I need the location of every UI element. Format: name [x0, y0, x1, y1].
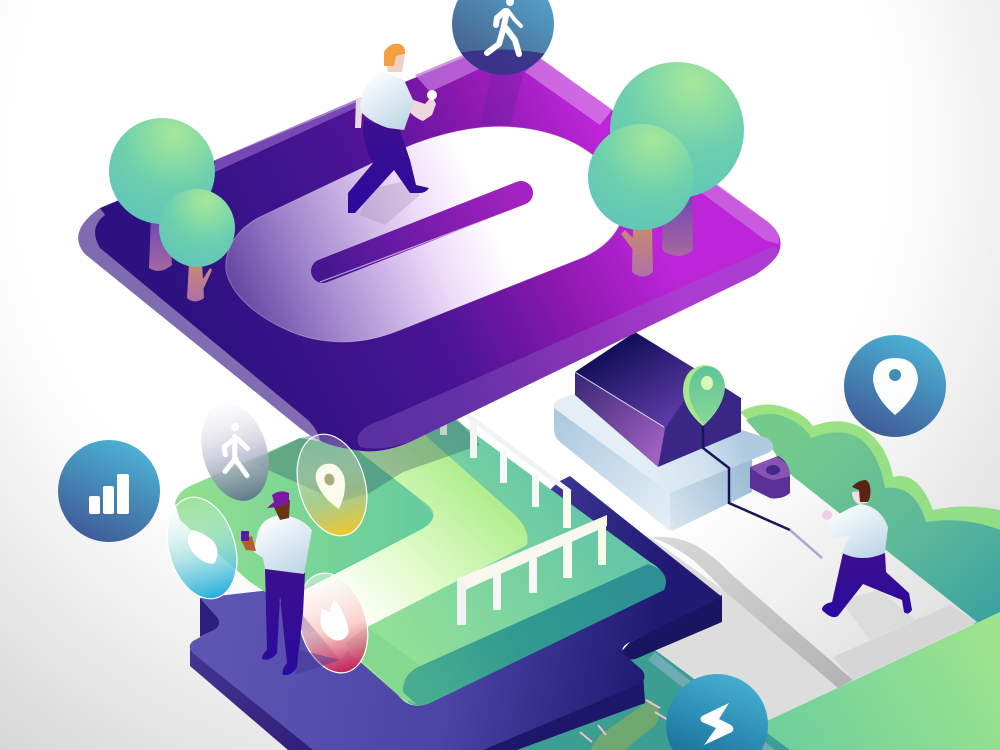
slab right face: [670, 456, 752, 531]
deck shadow: [250, 405, 480, 502]
big right tree trunk: [662, 190, 693, 256]
rim top-middle: [415, 50, 520, 92]
man with phone: [241, 491, 340, 675]
man trousers: [348, 120, 429, 213]
deck front green corner: [345, 627, 420, 705]
notch face: [200, 598, 219, 637]
rim top-left: [215, 97, 362, 172]
small right tree trunk: [621, 228, 653, 276]
road: [470, 400, 977, 750]
building front wall: [575, 372, 665, 467]
road cross strip: [833, 605, 977, 680]
slot: [323, 193, 521, 271]
icon: location circle: [844, 335, 946, 437]
map pin balloon: [683, 365, 725, 426]
deck front band: [403, 564, 666, 705]
phone man head: [273, 500, 290, 520]
road lower lane: [650, 537, 838, 750]
lens: flame: [287, 565, 379, 681]
man head: [385, 55, 405, 72]
left deck: [175, 438, 434, 617]
house on slab: [554, 332, 822, 558]
light reflection stripes: [480, 72, 524, 125]
cable: [703, 425, 790, 530]
runner shadow: [840, 590, 915, 640]
phone man shadow: [295, 650, 340, 675]
big left tree crown: [109, 118, 215, 224]
green deck: [175, 405, 666, 706]
phone man hand: [241, 536, 256, 551]
hedge: [740, 404, 1000, 626]
icon: signal bars circle: [58, 440, 160, 542]
light road: [300, 428, 528, 660]
phone man cap: [267, 491, 289, 508]
phone: [241, 531, 249, 541]
phone man shirt: [254, 515, 312, 574]
lens: water: [156, 489, 248, 607]
right trees: [588, 62, 744, 276]
walking man on platform: [348, 44, 437, 225]
lower platform right side: [622, 595, 722, 659]
road lane band: [650, 537, 853, 688]
big left tree trunk: [149, 215, 172, 271]
slab top: [554, 385, 773, 493]
icon: energy circle: [666, 674, 768, 750]
white oval path: [226, 127, 625, 342]
circuit strip under lower platform: [500, 650, 790, 750]
front fence: [457, 515, 607, 625]
rim top-right: [525, 58, 612, 125]
back fence: [440, 412, 571, 528]
deck surface: [303, 412, 665, 706]
man shadow: [360, 180, 420, 225]
rim bottom-right: [358, 248, 779, 449]
slab left face: [554, 405, 670, 531]
small right tree crown: [588, 124, 694, 230]
man arm and watch hand: [355, 96, 436, 128]
runner head: [852, 490, 870, 504]
left deck edge: [309, 520, 434, 592]
building roof: [575, 332, 702, 428]
building gable wall: [658, 373, 741, 467]
runner trousers: [822, 552, 912, 617]
rim left: [78, 208, 320, 441]
lower platform: [190, 476, 722, 750]
lower platform front side: [483, 673, 645, 750]
lens: location: [286, 426, 378, 544]
lower platform left side: [190, 640, 330, 750]
man shirt: [360, 72, 414, 130]
runner shirt: [828, 504, 888, 558]
lens: running: [190, 395, 280, 509]
icon: walking circle: [452, 0, 554, 75]
runner hair: [852, 480, 870, 502]
small left tree trunk: [187, 262, 212, 302]
runner hand: [822, 510, 832, 520]
lower platform top: [190, 476, 722, 750]
man hair: [384, 44, 405, 66]
walking person glyph: [487, 0, 521, 54]
runner on road: [822, 480, 915, 640]
big right tree crown: [610, 62, 744, 198]
top purple platform: [78, 49, 781, 451]
rim right: [695, 175, 779, 244]
small left tree crown: [159, 189, 235, 267]
running glyph: [213, 422, 255, 481]
socket: [750, 456, 790, 498]
platform body: [78, 49, 781, 451]
green field: [737, 612, 1000, 750]
left trees: [109, 118, 235, 302]
phone man trousers: [262, 568, 305, 675]
